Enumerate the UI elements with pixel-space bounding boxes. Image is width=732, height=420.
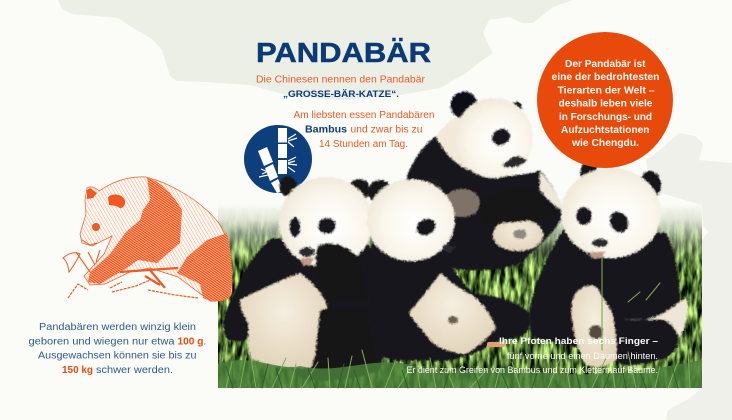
text block: six fingers: Er dient zum Greifen von Bambus und zum Klettern auf Bäume. [406, 365, 658, 376]
callout: endangered species circle: Tierarten der Welt – [558, 85, 655, 96]
text block: bamboo facts: Am liebsten essen Pandabären [294, 110, 434, 121]
panda: middle [367, 178, 530, 361]
apple slice [487, 342, 505, 347]
callout: endangered species circle [537, 32, 673, 168]
text block: six fingers: Ihre Pfoten haben sechs Finger – [499, 336, 659, 347]
text block: bamboo facts [294, 110, 434, 150]
photo: meadow background [218, 205, 702, 388]
text block: birth weight [28, 322, 206, 376]
text block: Chinese name: „GROSSE-BÄR-KATZE“. [283, 89, 399, 99]
icon: bamboo badge [244, 125, 312, 193]
text block: six fingers: fünf vorne und einen Daumen hinten. [507, 351, 658, 362]
text block: birth weight: schwer werden. [96, 365, 173, 376]
text block: bamboo facts: Bambus [305, 124, 348, 136]
panda: right [529, 160, 688, 367]
callout: endangered species circle: deshalb leben viele [558, 99, 653, 110]
text block: birth weight: 150 kg [62, 365, 93, 376]
callout: endangered species circle: eine der bedrohtesten [552, 72, 660, 83]
map: China silhouette right [646, 133, 732, 420]
text block: birth weight: Pandabären werden winzig klein [39, 322, 196, 333]
text block: birth weight: 100 g [178, 336, 204, 348]
text block: bamboo facts: und zwar bis zu [350, 124, 422, 136]
text block: birth weight: geboren und wiegen nur etwa [28, 336, 175, 348]
callout: endangered species circle: Der Pandabär ist [565, 59, 646, 70]
text block: birth weight: Ausgewachsen können sie bis zu [38, 350, 196, 362]
text block: six fingers [406, 336, 659, 376]
callout: endangered species circle: wie Chengdu. [571, 138, 639, 149]
callout: endangered species circle: in Forschungs- und [559, 112, 652, 123]
photo: foreground grass [218, 255, 702, 388]
text block: bamboo facts: 14 Stunden am Tag. [319, 139, 408, 150]
text block: birth weight: . [204, 336, 206, 348]
text block: Chinese name: Die Chinesen nennen den Pandabär [256, 74, 426, 86]
icon: orange engraved panda [63, 177, 232, 301]
callout: endangered species circle: Aufzuchtstationen [561, 125, 650, 136]
panda: back centre [406, 92, 566, 270]
text block: Chinese name [256, 74, 426, 99]
title: PANDABÄR [256, 37, 431, 68]
map: China silhouette top [58, 0, 573, 100]
panda: left [223, 176, 388, 380]
